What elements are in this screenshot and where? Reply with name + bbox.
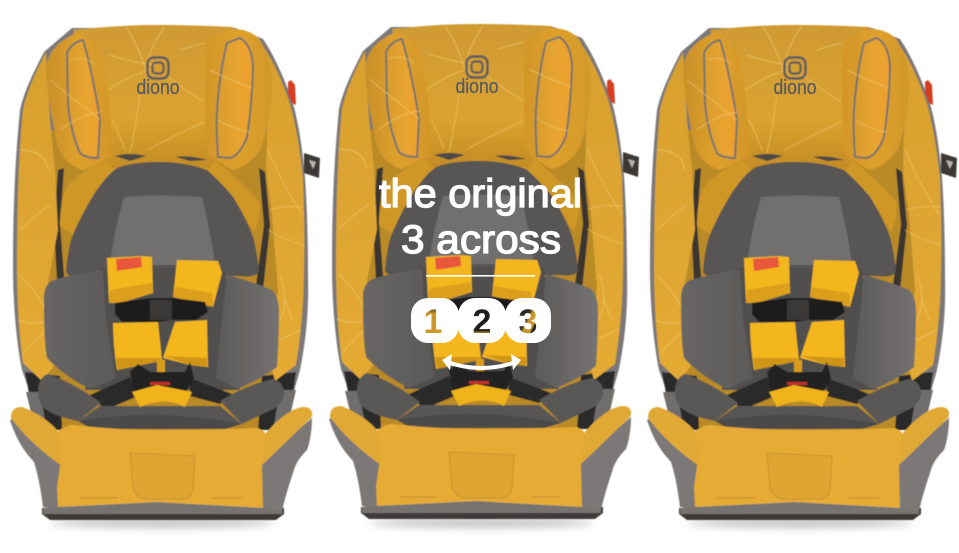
heading: 3 across: [401, 218, 561, 262]
seat 1 headrest logo text: diono: [136, 77, 180, 99]
seat 2: [329, 24, 639, 528]
heading: [379, 172, 582, 262]
seat 1: [10, 25, 320, 528]
double-headed arrow: [442, 354, 521, 370]
heading: the original: [379, 172, 582, 216]
seat 3 headrest logo text: diono: [774, 77, 816, 99]
number tiles 1 2 3: 1: [424, 303, 442, 341]
number tiles 1 2 3: 2: [473, 303, 491, 341]
seat 2 headrest logo text: diono: [456, 76, 498, 98]
divider under heading: [426, 275, 535, 277]
seat 3: [647, 25, 957, 528]
number tiles 1 2 3: [411, 298, 551, 343]
number tiles 1 2 3: 3: [519, 303, 537, 341]
